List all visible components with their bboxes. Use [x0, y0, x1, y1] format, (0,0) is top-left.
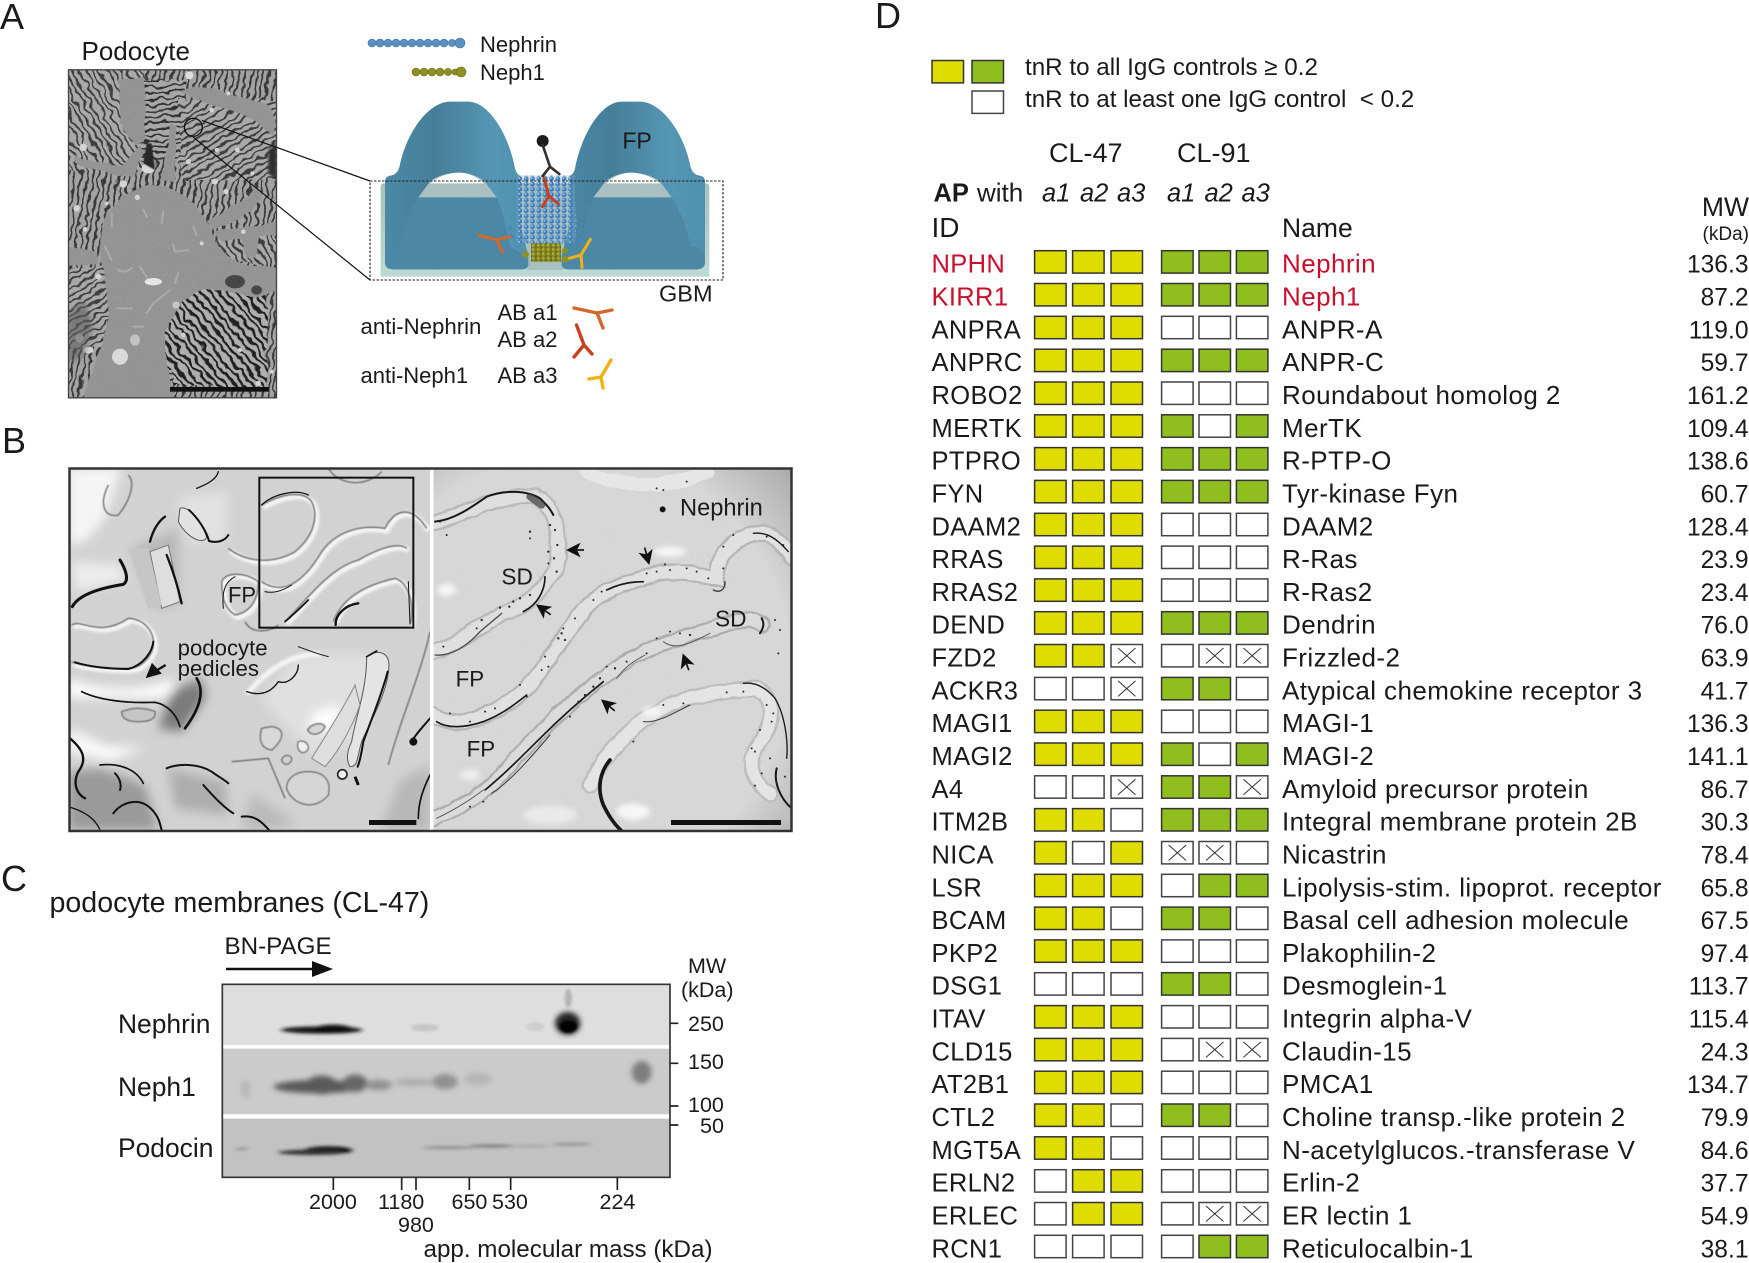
- row RRAS2: R-Ras2: [1282, 577, 1373, 607]
- row ERLN2: 37.7: [1701, 1171, 1748, 1198]
- row KIRR1: 87.2: [1701, 284, 1748, 312]
- row NPHN: [932, 249, 1748, 279]
- row MAGI1: 136.3: [1687, 711, 1748, 738]
- row DEND: Dendrin: [1282, 610, 1376, 640]
- row DEND: DEND: [932, 612, 1005, 640]
- row MAGI2: MAGI-2: [1282, 741, 1374, 771]
- scale bar: [170, 387, 269, 392]
- row DAAM2: 128.4: [1687, 514, 1748, 541]
- blot molecular mass labels: app. molecular mass (kDa): [424, 1236, 712, 1263]
- row ROBO2: ROBO2: [932, 382, 1023, 410]
- row KIRR1: [932, 282, 1748, 312]
- label podocyte pedicles: podocyte: [178, 636, 268, 661]
- blot MW scale labels: 250: [688, 1012, 724, 1036]
- blot row labels: Neph1: [118, 1072, 196, 1102]
- table header: cell lines: [1049, 138, 1251, 168]
- nephrin lattice: [517, 175, 577, 243]
- foot process right: [562, 102, 705, 269]
- row ACKR3: [932, 675, 1748, 705]
- row MERTK: [932, 413, 1748, 443]
- soft shading: [68, 468, 430, 830]
- row PKP2: PKP2: [932, 940, 998, 968]
- legend: color key: tnR to all IgG controls ≥ 0.2: [1025, 54, 1318, 81]
- table header: AP with antibodies: AP: [934, 180, 969, 208]
- blot molecular mass labels: 2000: [309, 1190, 357, 1214]
- membrane relief highlights: [74, 497, 429, 694]
- callout zoom lines: [193, 120, 370, 280]
- row ITAV: Integrin alpha-V: [1282, 1004, 1473, 1034]
- arrow: [596, 694, 620, 717]
- blot MW scale labels: (kDa): [681, 978, 734, 1002]
- legend: color key: tnR to at least one IgG control < 0.2: [1025, 86, 1414, 113]
- row ERLEC: ERLEC: [932, 1202, 1018, 1230]
- row MAGI1: [932, 708, 1748, 738]
- row CTL2: 79.9: [1701, 1105, 1748, 1132]
- legend: Nephrin beads: [368, 32, 557, 57]
- row PTPRO: R-PTP-O: [1282, 446, 1392, 476]
- blot row labels: Nephrin: [118, 1009, 210, 1039]
- table header: columns: Name: [1282, 213, 1353, 243]
- table: interaction rows: [932, 249, 1748, 1263]
- row ANPRC: 59.7: [1701, 350, 1748, 377]
- row NPHN: NPHN: [932, 251, 1005, 279]
- table header: AP with antibodies: a2: [1204, 180, 1233, 208]
- row ERLEC: [932, 1200, 1748, 1230]
- row DEND: [932, 610, 1748, 640]
- schematic: slit diaphragm between foot processes: [381, 102, 709, 277]
- row ERLEC: ER lectin 1: [1282, 1200, 1412, 1230]
- row ACKR3: 41.7: [1701, 678, 1748, 705]
- label FP: FP: [622, 127, 652, 153]
- yellow antibody: [569, 239, 590, 267]
- row DAAM2: [932, 511, 1748, 541]
- row PTPRO: PTPRO: [932, 448, 1021, 476]
- legend: Neph1 beads: Neph1: [480, 60, 545, 85]
- row ANPRC: [932, 347, 1748, 377]
- row PKP2: [932, 938, 1748, 968]
- row KIRR1: Neph1: [1282, 282, 1361, 312]
- row RRAS: 23.9: [1701, 547, 1748, 574]
- row CLD15: 24.3: [1701, 1039, 1748, 1066]
- blot row labels: Podocin: [118, 1133, 213, 1163]
- highlights: [437, 547, 687, 824]
- row RRAS: [932, 544, 1748, 574]
- row ANPRC: ANPRC: [932, 349, 1023, 377]
- row ROBO2: 161.2: [1687, 383, 1748, 410]
- row MGT5A: MGT5A: [932, 1137, 1021, 1165]
- row RRAS2: [932, 577, 1748, 607]
- foot process left: [385, 102, 528, 269]
- legend: Nephrin gold particle: Nephrin: [680, 496, 763, 522]
- row NICA: Nicastrin: [1282, 840, 1387, 870]
- label podocyte pedicles: pedicles: [178, 656, 259, 681]
- table header: cell lines: CL-47: [1049, 138, 1123, 168]
- panel: podocyte title: Podocyte: [82, 36, 190, 66]
- row AT2B1: AT2B1: [932, 1071, 1009, 1099]
- arrow: [638, 546, 656, 567]
- BN-PAGE label with arrow: BN-PAGE: [224, 933, 332, 960]
- row AT2B1: [932, 1069, 1748, 1099]
- row ERLN2: Erlin-2: [1282, 1168, 1360, 1198]
- blot molecular mass labels: 224: [600, 1190, 635, 1214]
- row DAAM2: DAAM2: [932, 513, 1021, 541]
- row CLD15: CLD15: [932, 1038, 1013, 1066]
- row CTL2: [932, 1102, 1748, 1132]
- row NICA: 78.4: [1701, 842, 1748, 870]
- table header: columns: MW: [1702, 192, 1749, 222]
- row ITAV: 115.4: [1689, 1007, 1748, 1034]
- inset box: [259, 478, 413, 628]
- legend: Neph1 beads: [412, 60, 545, 85]
- blot strip neph1: [222, 1049, 670, 1114]
- row ITM2B: Integral membrane protein 2B: [1282, 807, 1638, 837]
- GBM layer: [381, 183, 709, 277]
- blot molecular mass labels: 650: [452, 1190, 487, 1214]
- row MAGI2: 141.1: [1687, 744, 1748, 771]
- row RCN1: Reticulocalbin-1: [1282, 1233, 1474, 1263]
- row A4: Amyloid precursor protein: [1282, 774, 1589, 804]
- row ACKR3: ACKR3: [932, 677, 1018, 705]
- row ANPRA: 119.0: [1689, 317, 1748, 344]
- row MGT5A: 84.6: [1701, 1138, 1748, 1165]
- label GBM: GBM: [659, 280, 713, 306]
- row NPHN: Nephrin: [1282, 249, 1376, 279]
- row ROBO2: [932, 380, 1748, 410]
- label podocyte pedicles: [178, 636, 268, 681]
- table header: AP with antibodies: a1: [1042, 180, 1070, 208]
- row ERLN2: ERLN2: [932, 1170, 1015, 1198]
- sausage fold: [347, 652, 389, 767]
- callout circle: [184, 118, 202, 136]
- row BCAM: BCAM: [932, 907, 1007, 935]
- row FZD2: Frizzled-2: [1282, 642, 1400, 672]
- legend: antibodies: AB a1: [498, 300, 557, 325]
- panel label B: B: [2, 420, 26, 461]
- row LSR: Lipolysis-stim. lipoprot. receptor: [1282, 872, 1662, 902]
- row PTPRO: 138.6: [1687, 449, 1748, 476]
- table header: AP with antibodies: a1: [1167, 180, 1195, 208]
- scale bar: [671, 820, 781, 825]
- row PKP2: 97.4: [1701, 941, 1748, 968]
- blot molecular mass labels: 530: [492, 1190, 528, 1214]
- blot strip podocin: [222, 1119, 670, 1177]
- row ACKR3: Atypical chemokine receptor 3: [1282, 675, 1642, 705]
- arrow: [676, 651, 696, 673]
- row MGT5A: [932, 1135, 1748, 1165]
- blot MW scale labels: 50: [700, 1114, 724, 1138]
- row ANPRA: [932, 314, 1748, 344]
- legend: antibodies: [360, 300, 612, 388]
- row ITAV: ITAV: [932, 1006, 986, 1034]
- row ROBO2: Roundabout homolog 2: [1282, 380, 1561, 410]
- row PKP2: Plakophilin-2: [1282, 938, 1436, 968]
- black antibody with gold particle: [537, 135, 559, 176]
- red antibody: [542, 178, 558, 207]
- legend: antibodies: AB a2: [498, 327, 557, 352]
- row FYN: Tyr-kinase Fyn: [1282, 478, 1458, 508]
- table header: AP with antibodies: a3: [1117, 180, 1145, 208]
- arrow to pedicles: [148, 665, 166, 676]
- dashed GBM inset box: [370, 181, 723, 280]
- label FP: FP: [228, 582, 256, 607]
- panel: A scanning electron micrograph of podocyte: [68, 69, 278, 398]
- row RRAS: R-Ras: [1282, 544, 1358, 574]
- row PTPRO: [932, 446, 1748, 476]
- row DAAM2: DAAM2: [1282, 511, 1374, 541]
- blot MW scale labels: MW: [688, 954, 727, 978]
- row RCN1: RCN1: [932, 1235, 1002, 1263]
- legend: antibodies: anti-Nephrin: [360, 314, 481, 339]
- orange antibody: [479, 235, 510, 252]
- row CLD15: Claudin-15: [1282, 1036, 1412, 1066]
- blot row labels: [118, 1009, 213, 1163]
- row DSG1: 113.7: [1689, 974, 1748, 1001]
- BN-PAGE label with arrow: [224, 933, 333, 977]
- panel label C: C: [1, 858, 27, 899]
- row LSR: 65.8: [1701, 875, 1748, 902]
- row NICA: NICA: [932, 842, 994, 870]
- row FZD2: [932, 642, 1748, 672]
- row A4: A4: [932, 776, 963, 804]
- row NPHN: 136.3: [1687, 252, 1748, 279]
- table header: AP with antibodies: a2: [1080, 180, 1108, 208]
- row NICA: [932, 840, 1748, 870]
- row LSR: [932, 872, 1748, 902]
- row RRAS: RRAS: [932, 546, 1004, 574]
- row FYN: FYN: [932, 480, 984, 508]
- table header: columns: (kDa): [1703, 224, 1749, 245]
- row BCAM: 67.5: [1701, 908, 1748, 935]
- blot MW scale labels: [681, 954, 734, 1138]
- label FP: FP: [456, 667, 484, 692]
- legend: Nephrin beads: Nephrin: [480, 32, 557, 57]
- row BCAM: [932, 905, 1748, 935]
- immunogold particles: [439, 481, 786, 808]
- row MAGI1: MAGI1: [932, 710, 1013, 738]
- legend: color key: [932, 54, 1414, 113]
- row ITM2B: 30.3: [1701, 810, 1748, 837]
- fracture bands: [433, 472, 792, 818]
- blot MW scale labels: 100: [688, 1093, 724, 1117]
- row DSG1: [932, 971, 1748, 1001]
- row CLD15: [932, 1036, 1748, 1066]
- row CTL2: CTL2: [932, 1104, 995, 1132]
- table header: columns: [932, 192, 1749, 245]
- row ERLEC: 54.9: [1701, 1204, 1748, 1230]
- row RCN1: 38.1: [1701, 1236, 1748, 1263]
- blot strip nephrin: [222, 984, 670, 1045]
- panel: B magnified micrograph with immunogold: [433, 468, 792, 831]
- blot molecular mass labels: [309, 1190, 712, 1263]
- legend: antibodies: AB a3: [498, 363, 557, 388]
- row MAGI2: [932, 741, 1748, 771]
- panel C title: podocyte membranes (CL-47): [50, 887, 429, 919]
- row DSG1: DSG1: [932, 973, 1002, 1001]
- row A4: 86.7: [1701, 777, 1748, 804]
- row FYN: 60.7: [1701, 481, 1748, 508]
- blot molecular mass labels: 980: [398, 1213, 434, 1237]
- table header: AP with antibodies: with: [976, 178, 1023, 208]
- legend: antibodies: anti-Neph1: [360, 363, 468, 388]
- row MAGI1: MAGI-1: [1282, 708, 1374, 738]
- row RRAS2: 23.4: [1701, 580, 1748, 607]
- panel B divider and frame: [70, 468, 792, 831]
- top-axis ticks: [333, 1023, 678, 1190]
- table header: cell lines: CL-91: [1177, 138, 1251, 168]
- label FP: FP: [467, 737, 495, 762]
- row KIRR1: KIRR1: [932, 284, 1008, 312]
- membrane outlines: [72, 468, 430, 805]
- row RCN1: [932, 1233, 1748, 1263]
- row CTL2: Choline transp.-like protein 2: [1282, 1102, 1626, 1132]
- row ANPRC: ANPR-C: [1282, 347, 1384, 377]
- row RRAS2: RRAS2: [932, 579, 1018, 607]
- row DSG1: Desmoglein-1: [1282, 971, 1447, 1001]
- table header: AP with antibodies: [934, 178, 1270, 208]
- label SD: SD: [715, 606, 746, 632]
- row BCAM: Basal cell adhesion molecule: [1282, 905, 1629, 935]
- row MGT5A: N-acetylglucos.-transferase V: [1282, 1135, 1635, 1165]
- scale bar: [369, 820, 416, 825]
- dark ridges: [68, 472, 430, 830]
- table header: AP with antibodies: a3: [1242, 180, 1270, 208]
- row AT2B1: PMCA1: [1282, 1069, 1374, 1099]
- label SD: SD: [501, 563, 533, 589]
- panel: B freeze-fracture overview micrograph: [68, 468, 430, 831]
- row MERTK: 109.4: [1687, 416, 1748, 443]
- row MERTK: MerTK: [1282, 413, 1362, 443]
- row ITAV: [932, 1004, 1748, 1034]
- row DEND: 76.0: [1701, 613, 1748, 640]
- row FYN: [932, 478, 1748, 508]
- row ITM2B: ITM2B: [932, 809, 1008, 837]
- row ERLN2: [932, 1168, 1748, 1198]
- blot: BN-PAGE western blot: [222, 984, 678, 1190]
- arrow: [532, 598, 555, 621]
- row ANPRA: ANPR-A: [1282, 314, 1383, 344]
- table header: columns: ID: [932, 212, 960, 243]
- row LSR: LSR: [932, 874, 982, 902]
- row MAGI2: MAGI2: [932, 743, 1013, 771]
- row FZD2: FZD2: [932, 644, 997, 672]
- row ITM2B: [932, 807, 1748, 837]
- row ANPRA: ANPRA: [932, 316, 1021, 344]
- blot MW scale labels: 150: [688, 1050, 724, 1074]
- row FZD2: 63.9: [1701, 646, 1748, 672]
- row A4: [932, 774, 1748, 804]
- dark edges: [435, 492, 792, 831]
- row AT2B1: 134.7: [1687, 1072, 1748, 1099]
- neph1 lattice: [531, 243, 561, 262]
- arrow: [566, 543, 584, 557]
- row MERTK: MERTK: [932, 415, 1022, 443]
- blot molecular mass labels: 1180: [378, 1190, 424, 1214]
